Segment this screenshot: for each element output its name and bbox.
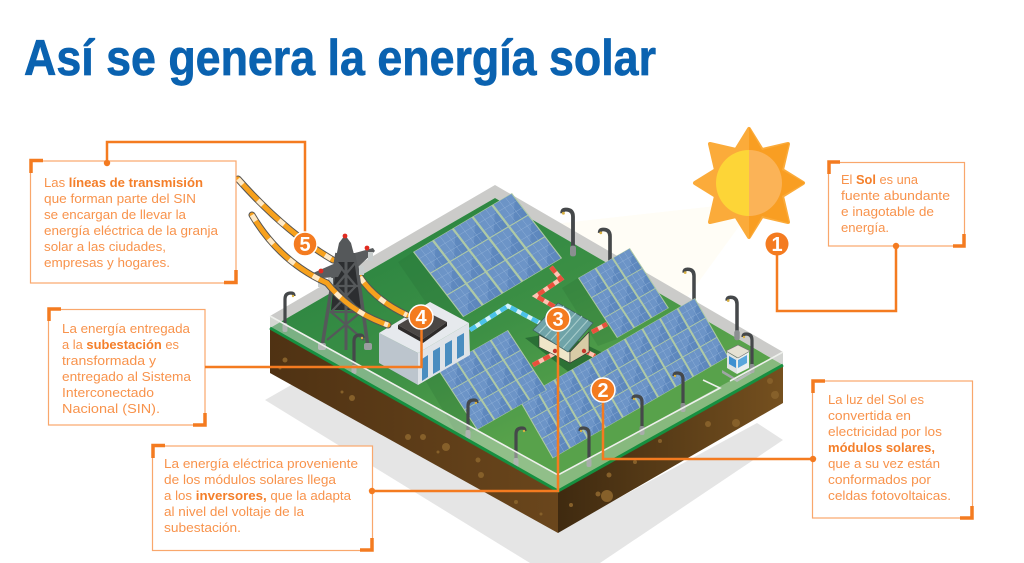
text: inverters: al nivel del voltaje de la bbox=[164, 504, 305, 519]
text: solar modules bbox=[828, 392, 951, 503]
green ground edge bbox=[270, 328, 783, 491]
solar array: top left bbox=[413, 193, 562, 317]
text: substation: Nacional (SIN). bbox=[62, 401, 160, 416]
panel: substation bbox=[48, 309, 205, 425]
solar array: lower left bbox=[438, 330, 547, 430]
panel: solar modules bbox=[812, 381, 972, 518]
text: transmission lines: Las líneas de transmisión bbox=[44, 175, 203, 190]
connector line 3 bbox=[369, 330, 558, 494]
marker 5 bbox=[293, 232, 317, 256]
text: sun bbox=[841, 172, 950, 235]
text: inverters bbox=[164, 456, 358, 535]
title: Así se genera la energía solar bbox=[24, 30, 656, 86]
text: sun: El Sol es una bbox=[841, 172, 919, 187]
back lamps bbox=[562, 210, 740, 340]
panel: sun bbox=[828, 162, 964, 246]
solar array: middle right bbox=[578, 248, 669, 338]
grass field bbox=[270, 198, 783, 491]
text: solar modules: módulos solares, bbox=[828, 440, 935, 455]
text: solar modules: electricidad por los bbox=[828, 424, 943, 439]
connector line 2 bbox=[603, 400, 816, 462]
cables: red bbox=[533, 267, 607, 365]
text: sun: energía. bbox=[841, 220, 889, 235]
text: solar modules: conformados por bbox=[828, 472, 932, 487]
front lamps bbox=[282, 293, 686, 467]
text: inverters: La energía eléctrica proveniente bbox=[164, 456, 358, 471]
text: inverters: a los inversores, que la adapta bbox=[164, 488, 352, 503]
marker 4: 4 bbox=[415, 307, 427, 329]
glass fence: right bbox=[558, 352, 783, 491]
transmission tower bbox=[313, 234, 375, 350]
booth lamp bbox=[743, 334, 754, 373]
inverter shadow bbox=[525, 332, 603, 373]
text: transmission lines: que forman parte del SIN bbox=[44, 191, 196, 206]
marker 3 bbox=[546, 307, 570, 331]
lower transmission line bbox=[252, 215, 388, 325]
substation building bbox=[379, 302, 470, 385]
text: transmission lines: se encargan de llevar la bbox=[44, 207, 187, 222]
marker 2: 2 bbox=[597, 380, 609, 402]
ground shadows bbox=[379, 252, 617, 436]
text: transmission lines: energía eléctrica de la granja bbox=[44, 223, 219, 238]
text: solar modules: celdas fotovoltaicas. bbox=[828, 488, 951, 503]
text: sun: e inagotable de bbox=[841, 204, 934, 219]
glass fence: left bbox=[270, 316, 558, 491]
panel: transmission lines bbox=[30, 160, 236, 283]
inverter house bbox=[533, 303, 593, 363]
soil: right face bbox=[558, 365, 783, 533]
cables: blue bbox=[470, 306, 540, 330]
sunlight beams bbox=[545, 205, 740, 335]
text: inverters: subestación. bbox=[164, 520, 241, 535]
panel: inverters bbox=[152, 446, 372, 550]
marker 5: 5 bbox=[299, 234, 311, 256]
text: substation: Interconectado bbox=[62, 385, 154, 400]
marker 1: 1 bbox=[771, 234, 783, 256]
back wall bbox=[270, 185, 783, 365]
white rim bbox=[270, 316, 783, 491]
sun bbox=[695, 127, 805, 239]
text: substation bbox=[62, 321, 192, 416]
marker 2 bbox=[591, 378, 615, 402]
connector line 4 bbox=[205, 328, 422, 367]
text: transmission lines: solar a las ciudades, bbox=[44, 239, 166, 254]
marker 4 bbox=[409, 305, 433, 329]
text: substation: entregado al Sistema bbox=[62, 369, 192, 384]
text: sun: fuente abundante bbox=[841, 188, 950, 203]
connector line 5 bbox=[104, 142, 305, 235]
soil: left face bbox=[270, 328, 558, 533]
guard booth bbox=[722, 345, 752, 382]
transmission lines bbox=[238, 179, 407, 315]
ground shadow bbox=[265, 380, 783, 563]
connector line 1 bbox=[777, 243, 899, 311]
text: solar modules: que a su vez están bbox=[828, 456, 940, 471]
text: substation: La energía entregada bbox=[62, 321, 191, 336]
soil pebbles bbox=[278, 358, 779, 516]
text: transmission lines: empresas y hogares. bbox=[44, 255, 170, 270]
text: inverters: de los módulos solares llega bbox=[164, 472, 337, 487]
text: solar modules: La luz del Sol es bbox=[828, 392, 924, 407]
text: substation: a la subestación es bbox=[62, 337, 179, 352]
text: solar modules: convertida en bbox=[828, 408, 911, 423]
text: transmission lines bbox=[44, 175, 219, 270]
text: substation: transformada y bbox=[62, 353, 157, 368]
solar array: large right bbox=[519, 298, 729, 458]
solar farm platform bbox=[238, 179, 783, 533]
marker 3: 3 bbox=[552, 309, 564, 331]
marker 1 bbox=[766, 232, 788, 256]
